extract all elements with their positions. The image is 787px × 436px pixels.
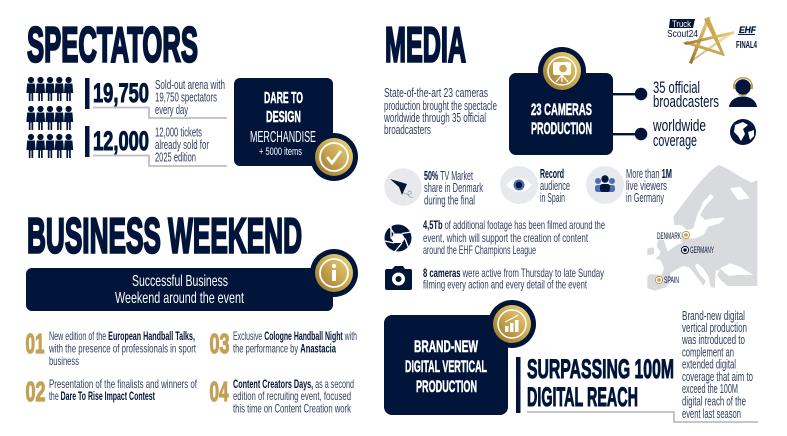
panel: brand-new digital vertical production <box>384 300 536 415</box>
item 02: 02 <box>26 376 46 407</box>
text: 8 cameras active: filming every action and every detail of the event <box>423 278 587 292</box>
panel: successful business weekend: Successful Business <box>132 273 228 290</box>
stat: surpassing 100m digital reach: SURPASSING 100M <box>527 354 674 384</box>
icon: info badge <box>310 249 358 297</box>
text: digital production description: Brand-new digital <box>682 309 745 323</box>
text: 35 official broadcasters <box>653 78 719 111</box>
stat: 19,750 spectators: 19,750 <box>93 78 149 108</box>
stat: tv market share in denmark: share in Denmark <box>424 181 483 195</box>
icon: camera aperture <box>384 224 412 252</box>
panel: dare to design merchandise <box>234 78 358 181</box>
item 04: edition of recruiting event, focused <box>233 389 351 403</box>
text: media intro: production brought the spectacle <box>384 99 497 113</box>
stat: record audience in spain <box>500 166 570 205</box>
map marker: germany <box>681 245 714 255</box>
panel: 23 cameras production <box>509 47 613 155</box>
map marker: germany: GERMANY <box>690 245 714 255</box>
stat: 19,750 spectators: 19,750 spectators <box>155 90 217 104</box>
stat: 12,000 tickets: already sold for <box>155 138 209 152</box>
text: digital production description: event last season <box>682 407 741 421</box>
item 01: with the presence of professionals in sport <box>48 342 196 356</box>
text: media intro: worldwide through 35 official <box>383 111 486 125</box>
stat: record audience in spain: audience <box>540 179 570 193</box>
text: worldwide coverage: coverage <box>653 131 697 150</box>
text: 8 cameras active <box>423 266 604 292</box>
panel: successful business weekend: Weekend around the event <box>115 290 244 307</box>
text: 35 official broadcasters: 35 official <box>653 78 700 97</box>
map marker: spain: SPAIN <box>664 275 679 285</box>
item 01: business <box>49 354 79 368</box>
text: additional footage <box>423 218 605 257</box>
text: worldwide coverage: worldwide <box>652 116 706 135</box>
text: media intro: State-of-the-art 23 cameras <box>384 86 488 100</box>
text: additional footage: 4,5Tb of additional footage has been filmed around the <box>423 218 605 232</box>
map marker: denmark: DENMARK <box>657 231 681 241</box>
map marker: spain <box>655 275 679 285</box>
panel: brand-new digital vertical production: BRAND-NEW <box>414 337 479 356</box>
connectors: cameras to broadcasters and coverage <box>610 88 647 140</box>
stat: live viewers in germany: More than 1M <box>626 167 672 181</box>
logo: truckscout24 ehf final4: EHF <box>739 25 756 35</box>
icon: paper plane <box>384 168 422 206</box>
icon: eye <box>500 166 538 204</box>
item 03: Exclusive Cologne Handball Night with <box>233 329 357 343</box>
logo: truckscout24 ehf final4: FINAL4 <box>736 40 757 51</box>
icon: check badge <box>310 133 358 181</box>
panel: dare to design merchandise: DESIGN <box>266 109 301 126</box>
stat: surpassing 100m digital reach: DIGITAL REACH <box>527 382 638 412</box>
stat: live viewers in germany <box>586 166 672 205</box>
text: digital production description: vertical production <box>682 321 747 335</box>
stat: surpassing 100m digital reach <box>516 354 758 422</box>
icon: growth chart badge <box>488 300 536 348</box>
panel: dare to design merchandise: DARE TO <box>264 90 303 107</box>
stat: 19,750 spectators <box>85 78 227 118</box>
logo: truckscout24 ehf final4 <box>667 17 757 64</box>
item 04: Content Creators Days, as a second <box>233 377 354 391</box>
icon: group of viewers <box>586 166 624 204</box>
stat: 12,000 tickets: 2025 edition <box>155 150 196 164</box>
logo: truckscout24 ehf final4: Scout24 <box>667 29 698 40</box>
panel: brand-new digital vertical production: DIGITAL VERTICAL <box>405 357 487 376</box>
stat: 19,750 spectators: every day <box>155 103 188 117</box>
text: 8 cameras active: 8 cameras were active from Thursday to late Sunday <box>423 266 604 280</box>
text: digital production description: complement an <box>682 346 734 360</box>
text: digital production description: digital reach of the <box>682 394 746 408</box>
map: europe <box>647 165 757 291</box>
panel: dare to design merchandise: MERCHANDISE <box>250 129 316 146</box>
text: digital production description: exceed the 100M <box>682 382 738 396</box>
text: media intro <box>383 86 497 137</box>
stat: 19,750 spectators: Sold-out arena with <box>155 78 225 92</box>
item 03 <box>210 328 357 359</box>
stat: record audience in spain: in Spain <box>540 191 565 205</box>
text: additional footage: event, which will support the creation of content <box>423 231 588 245</box>
item 04: this time on Content Creation work <box>233 402 352 416</box>
stat: record audience in spain: Record <box>540 167 564 181</box>
panel: 23 cameras production: PRODUCTION <box>531 119 592 138</box>
icon: headset person <box>729 78 757 107</box>
icon: camera on tripod badge <box>538 47 586 95</box>
heading: media: MEDIA <box>385 18 466 72</box>
text: 35 official broadcasters: broadcasters <box>653 92 719 111</box>
item 01: New edition of the European Handball Talks, <box>49 329 195 343</box>
item 02: the Dare To Rise Impact Contest <box>49 389 155 403</box>
icon: globe <box>730 119 756 145</box>
text: digital production description <box>681 309 753 421</box>
item 01: 01 <box>26 328 44 359</box>
stat: 12,000 tickets: 12,000 <box>93 126 149 156</box>
text: media intro: broadcasters <box>384 123 431 137</box>
stat: tv market share in denmark: 50% TV Market <box>424 169 473 183</box>
item 04 <box>210 376 354 416</box>
icon: camera <box>385 266 412 290</box>
text: worldwide coverage <box>652 116 706 150</box>
item 04: 04 <box>210 376 229 407</box>
heading: spectators: SPECTATORS <box>27 18 198 72</box>
panel: 23 cameras production: 23 CAMERAS <box>531 100 592 119</box>
panel: dare to design merchandise: + 5000 items <box>259 146 302 158</box>
heading: business weekend: BUSINESS WEEKEND <box>27 210 302 264</box>
text: digital production description: extended digital <box>682 358 736 372</box>
text: additional footage: around the EHF Champions League <box>423 243 536 257</box>
stat: tv market share in denmark <box>384 168 483 208</box>
stat: 12,000 tickets: 12,000 tickets <box>155 126 202 140</box>
item 02: Presentation of the finalists and winners of <box>49 377 197 391</box>
item 01 <box>26 328 196 368</box>
stat: live viewers in germany: in Germany <box>626 191 664 205</box>
panel: brand-new digital vertical production: PRODUCTION <box>416 377 477 396</box>
stat: live viewers in germany: live viewers <box>626 179 667 193</box>
item 03: 03 <box>210 328 230 359</box>
item 03: the performance by Anastacia <box>233 342 336 356</box>
icon: crowd of spectators <box>26 77 73 158</box>
logo: truckscout24 ehf final4: Truck <box>672 19 691 29</box>
panel: successful business weekend <box>26 249 358 311</box>
stat: tv market share in denmark: during the final <box>424 194 475 208</box>
item 02 <box>26 376 197 407</box>
text: digital production description: was introduced to <box>681 333 745 347</box>
stat: 12,000 tickets <box>85 126 227 166</box>
